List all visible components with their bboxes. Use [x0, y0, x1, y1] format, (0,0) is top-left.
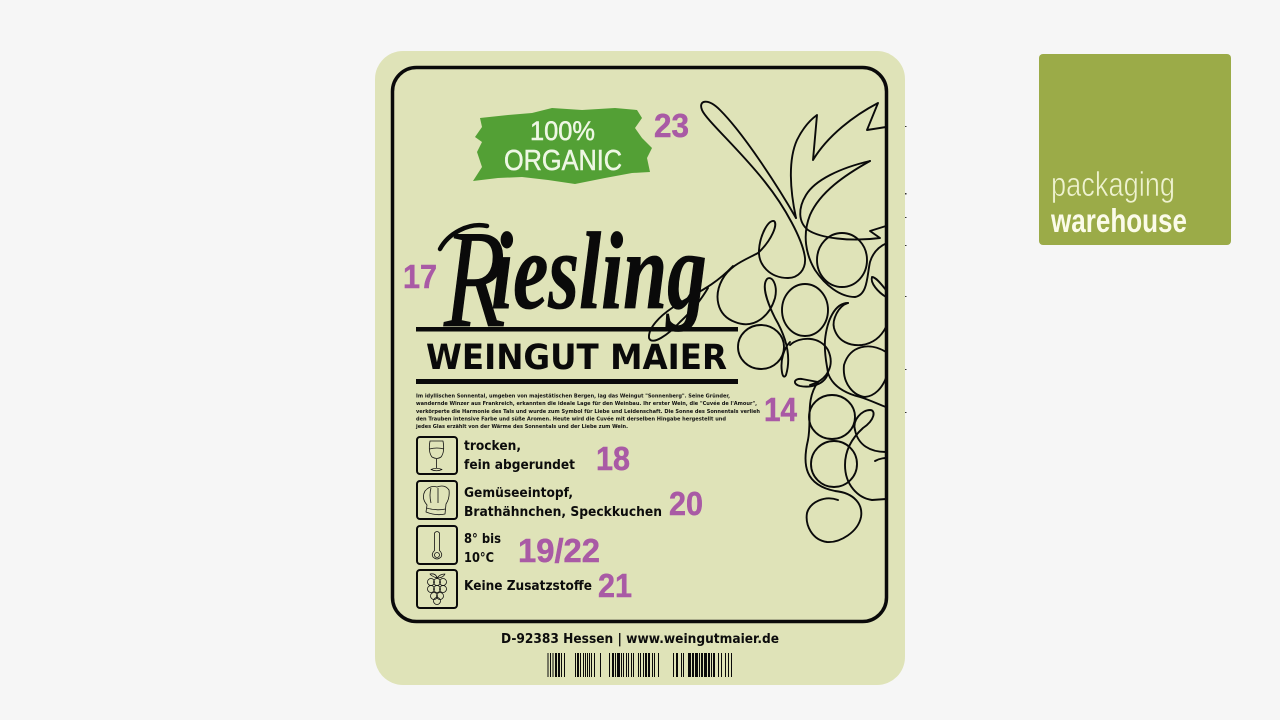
- logo: packaging warehouse: [1039, 54, 1231, 245]
- text block: winery story: jedes Glas erzählt von der Wärme des Sonnentals und der Liebe zum Wein.: [415, 424, 628, 430]
- annotation number 20: 20: [669, 485, 703, 522]
- icon: thermometer: [417, 526, 457, 564]
- title: Riesling: [440, 202, 707, 357]
- badge: 100% organic: [473, 108, 652, 184]
- rule below winery name: [416, 379, 738, 384]
- annotation number 14: 14: [764, 391, 798, 428]
- text: no additives: Keine Zusatzstoffe: [464, 579, 592, 594]
- text: serving temperature: [464, 532, 501, 566]
- logo: packaging warehouse: warehouse: [1050, 202, 1187, 239]
- text block: winery story: [415, 394, 760, 430]
- text: taste: fein abgerundet: [464, 458, 575, 473]
- illustration: grape vine line art: [649, 102, 887, 542]
- text block: winery story: wandernde Winzer aus Frankreich, erkannten die ideale Lage für den Weinbau. Ihr erster Wein, die "Cuvée de l'Amour",: [416, 400, 757, 407]
- annotation number 21: 21: [598, 567, 632, 604]
- annotation number 17: 17: [403, 258, 437, 295]
- panel: wine label: [375, 51, 905, 685]
- heading: winery name: WEINGUT MAIER: [426, 338, 727, 378]
- logo: packaging warehouse: packaging: [1051, 166, 1175, 204]
- icon: wine glass: [417, 437, 457, 474]
- text: taste: trocken,: [464, 439, 521, 454]
- title: Riesling: R: [443, 202, 506, 357]
- annotation number 23: 23: [654, 107, 689, 144]
- rule above winery name: [416, 327, 738, 332]
- text: serving temperature: 10°C: [464, 551, 494, 566]
- badge: 100% organic: 100%: [530, 116, 595, 146]
- text block: winery story: Im idyllischen Sonnental, umgeben von majestätischen Bergen, lag das Weingut "Sonnenberg". Seine Gründer,: [416, 394, 730, 400]
- text: taste: [464, 439, 575, 473]
- label inner frame: [392, 68, 886, 622]
- text block: winery story: den Trauben intensive Farbe und süße Aromen. Heute wird die Cuvée mit derselben Hingabe hergestellt und: [416, 416, 726, 422]
- barcode: [548, 653, 732, 677]
- icon: chef hat: [417, 481, 457, 519]
- text block: winery story: verkörperte die Harmonie des Tals und wurde zum Symbol für Liebe und Leidenschaft. Die Sonne des Sonnentals verlieh: [416, 409, 760, 415]
- annotation number 18: 18: [596, 440, 630, 477]
- footer address and website: D-92383 Hessen | www.weingutmaier.de: [501, 631, 779, 647]
- title: Riesling: iesling: [491, 210, 707, 332]
- annotation number 19/22: 19/22: [518, 532, 600, 569]
- icon: grapes: [417, 570, 457, 608]
- text: food pairing: [464, 486, 662, 520]
- text: food pairing: Gemüseeintopf,: [464, 486, 573, 501]
- badge: 100% organic: ORGANIC: [504, 145, 622, 177]
- text: serving temperature: 8° bis: [464, 532, 501, 547]
- text: food pairing: Brathähnchen, Speckkuchen: [464, 505, 662, 520]
